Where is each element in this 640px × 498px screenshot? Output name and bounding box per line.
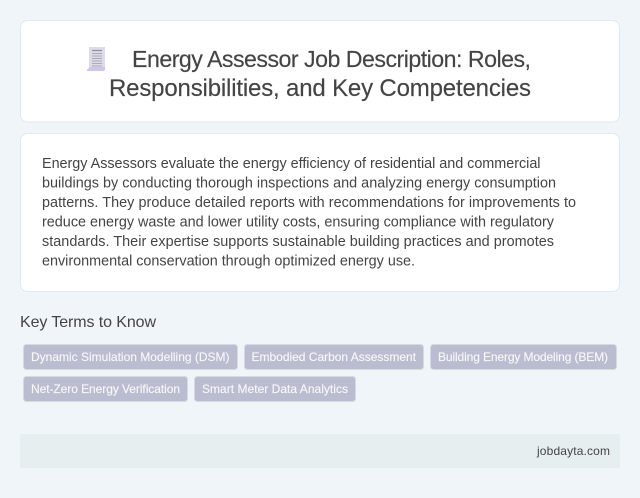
tag: Embodied Carbon Assessment: Embodied Carbon Assessment [252,350,417,364]
description text: reduce energy waste and lower utility costs, ensuring compliance with regulatory [42,214,555,230]
description text [42,156,576,270]
title: Responsibilities, and Key Competencies [109,75,531,102]
tag: Dynamic Simulation Modelling [24,344,238,370]
description text: buildings by conducting thorough inspections and analyzing energy consumption [42,176,556,192]
tag: Net-Zero Energy Verification [24,376,188,402]
tag: Building Energy Modeling: Building Energy Modeling (BEM) [438,350,608,364]
footer source: jobdayta.com [536,444,610,458]
tag: Net-Zero Energy Verification: Net-Zero Energy Verification [31,382,180,396]
description text: Energy Assessors evaluate the energy efficiency of residential and commercial [42,156,540,172]
footer bar [20,434,620,468]
panel: description card [20,134,620,292]
tag: Building Energy Modeling [430,344,616,370]
tag: Smart Meter Data Analytics: Smart Meter Data Analytics [202,382,348,396]
title: Energy Assessor Job Description: Roles, [132,46,531,72]
tag: Dynamic Simulation Modelling: Dynamic Simulation Modelling (DSM) [31,350,230,364]
tag: Embodied Carbon Assessment [244,344,424,370]
description text: environmental conservation through optimized energy use. [42,254,415,270]
heading: key terms: Key Terms to Know [20,314,156,331]
title [109,46,531,102]
icon: document scroll [87,47,105,71]
description text: patterns. They produce detailed reports with recommendations for improvements to [42,195,576,211]
panel: title card [20,20,620,122]
tag: Smart Meter Data Analytics [194,376,356,402]
description text: standards. Their expertise supports sustainable building practices and promotes [42,234,554,250]
